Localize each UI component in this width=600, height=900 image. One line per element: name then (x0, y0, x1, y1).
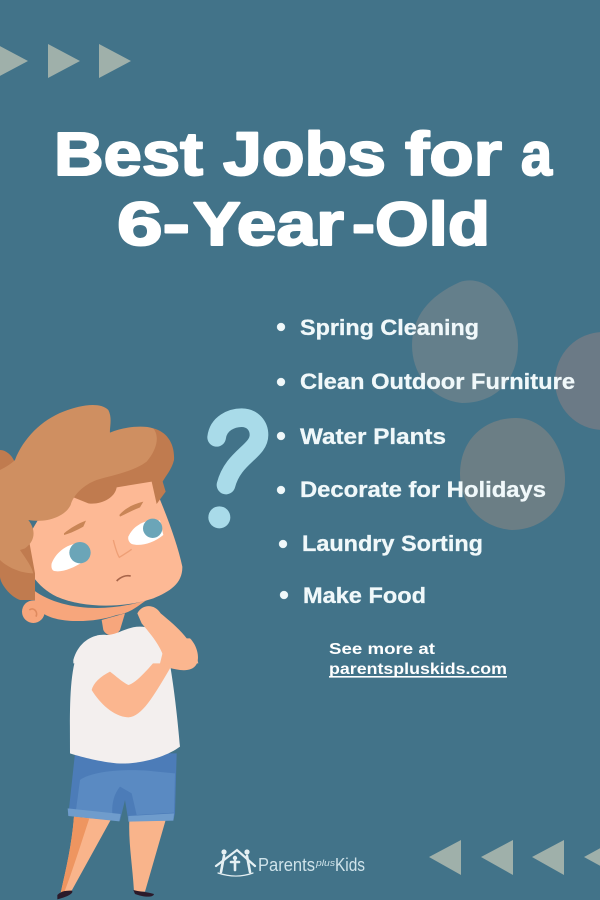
list item: Water Plants: Water Plants (300, 424, 446, 449)
legs (60, 817, 111, 896)
logo icon: family under roof (216, 849, 255, 876)
logo wordmark (258, 855, 365, 875)
title: Best (54, 120, 203, 188)
job list (277, 315, 575, 608)
logo wordmark: Parents (258, 855, 315, 875)
list item: Make Food: Make Food (303, 583, 426, 608)
right eye (128, 520, 163, 545)
decorative arrows: top (0, 44, 131, 78)
shirt (70, 633, 180, 764)
list item: Decorate for Holidays: Decorate for Holidays (300, 477, 546, 502)
title: -Old (352, 190, 490, 258)
jaw shadow (33, 590, 147, 621)
see more link: parentspluskids.com (329, 661, 507, 678)
elbow (163, 638, 198, 670)
list item: Clean Outdoor Furniture: Clean Outdoor Furniture (300, 369, 575, 394)
shirt collar (73, 627, 163, 663)
decorative arrows: bottom (429, 840, 600, 875)
boy illustration (0, 405, 198, 899)
neck (102, 613, 125, 635)
list item: Spring Cleaning: Spring Cleaning (300, 315, 479, 340)
title: Year (193, 190, 344, 258)
title (54, 120, 553, 258)
raised hand and forearm (137, 606, 198, 663)
boy: head (0, 405, 198, 663)
icon: question mark (208, 418, 259, 528)
see more link: See more at (329, 641, 436, 658)
title: Jobs (223, 120, 386, 188)
logo wordmark: plus (315, 858, 336, 868)
left eye (51, 543, 83, 571)
boy: body (57, 633, 198, 899)
title: a (521, 120, 553, 188)
logo: Parents plus Kids (216, 849, 365, 876)
eyebrows (64, 521, 86, 535)
logo wordmark: Kids (335, 855, 365, 875)
shorts (68, 753, 177, 821)
decorative blobs (412, 280, 600, 530)
title: 6- (117, 190, 190, 258)
ear (22, 600, 45, 623)
shoes (57, 891, 72, 899)
face (20, 480, 182, 606)
dark hair (0, 428, 174, 600)
title: for (405, 120, 502, 188)
list item: Laundry Sorting: Laundry Sorting (302, 531, 483, 556)
light hair (0, 405, 157, 573)
mouth (117, 576, 131, 581)
nose (113, 540, 132, 557)
folded arm (92, 652, 170, 717)
see more link (329, 641, 507, 678)
